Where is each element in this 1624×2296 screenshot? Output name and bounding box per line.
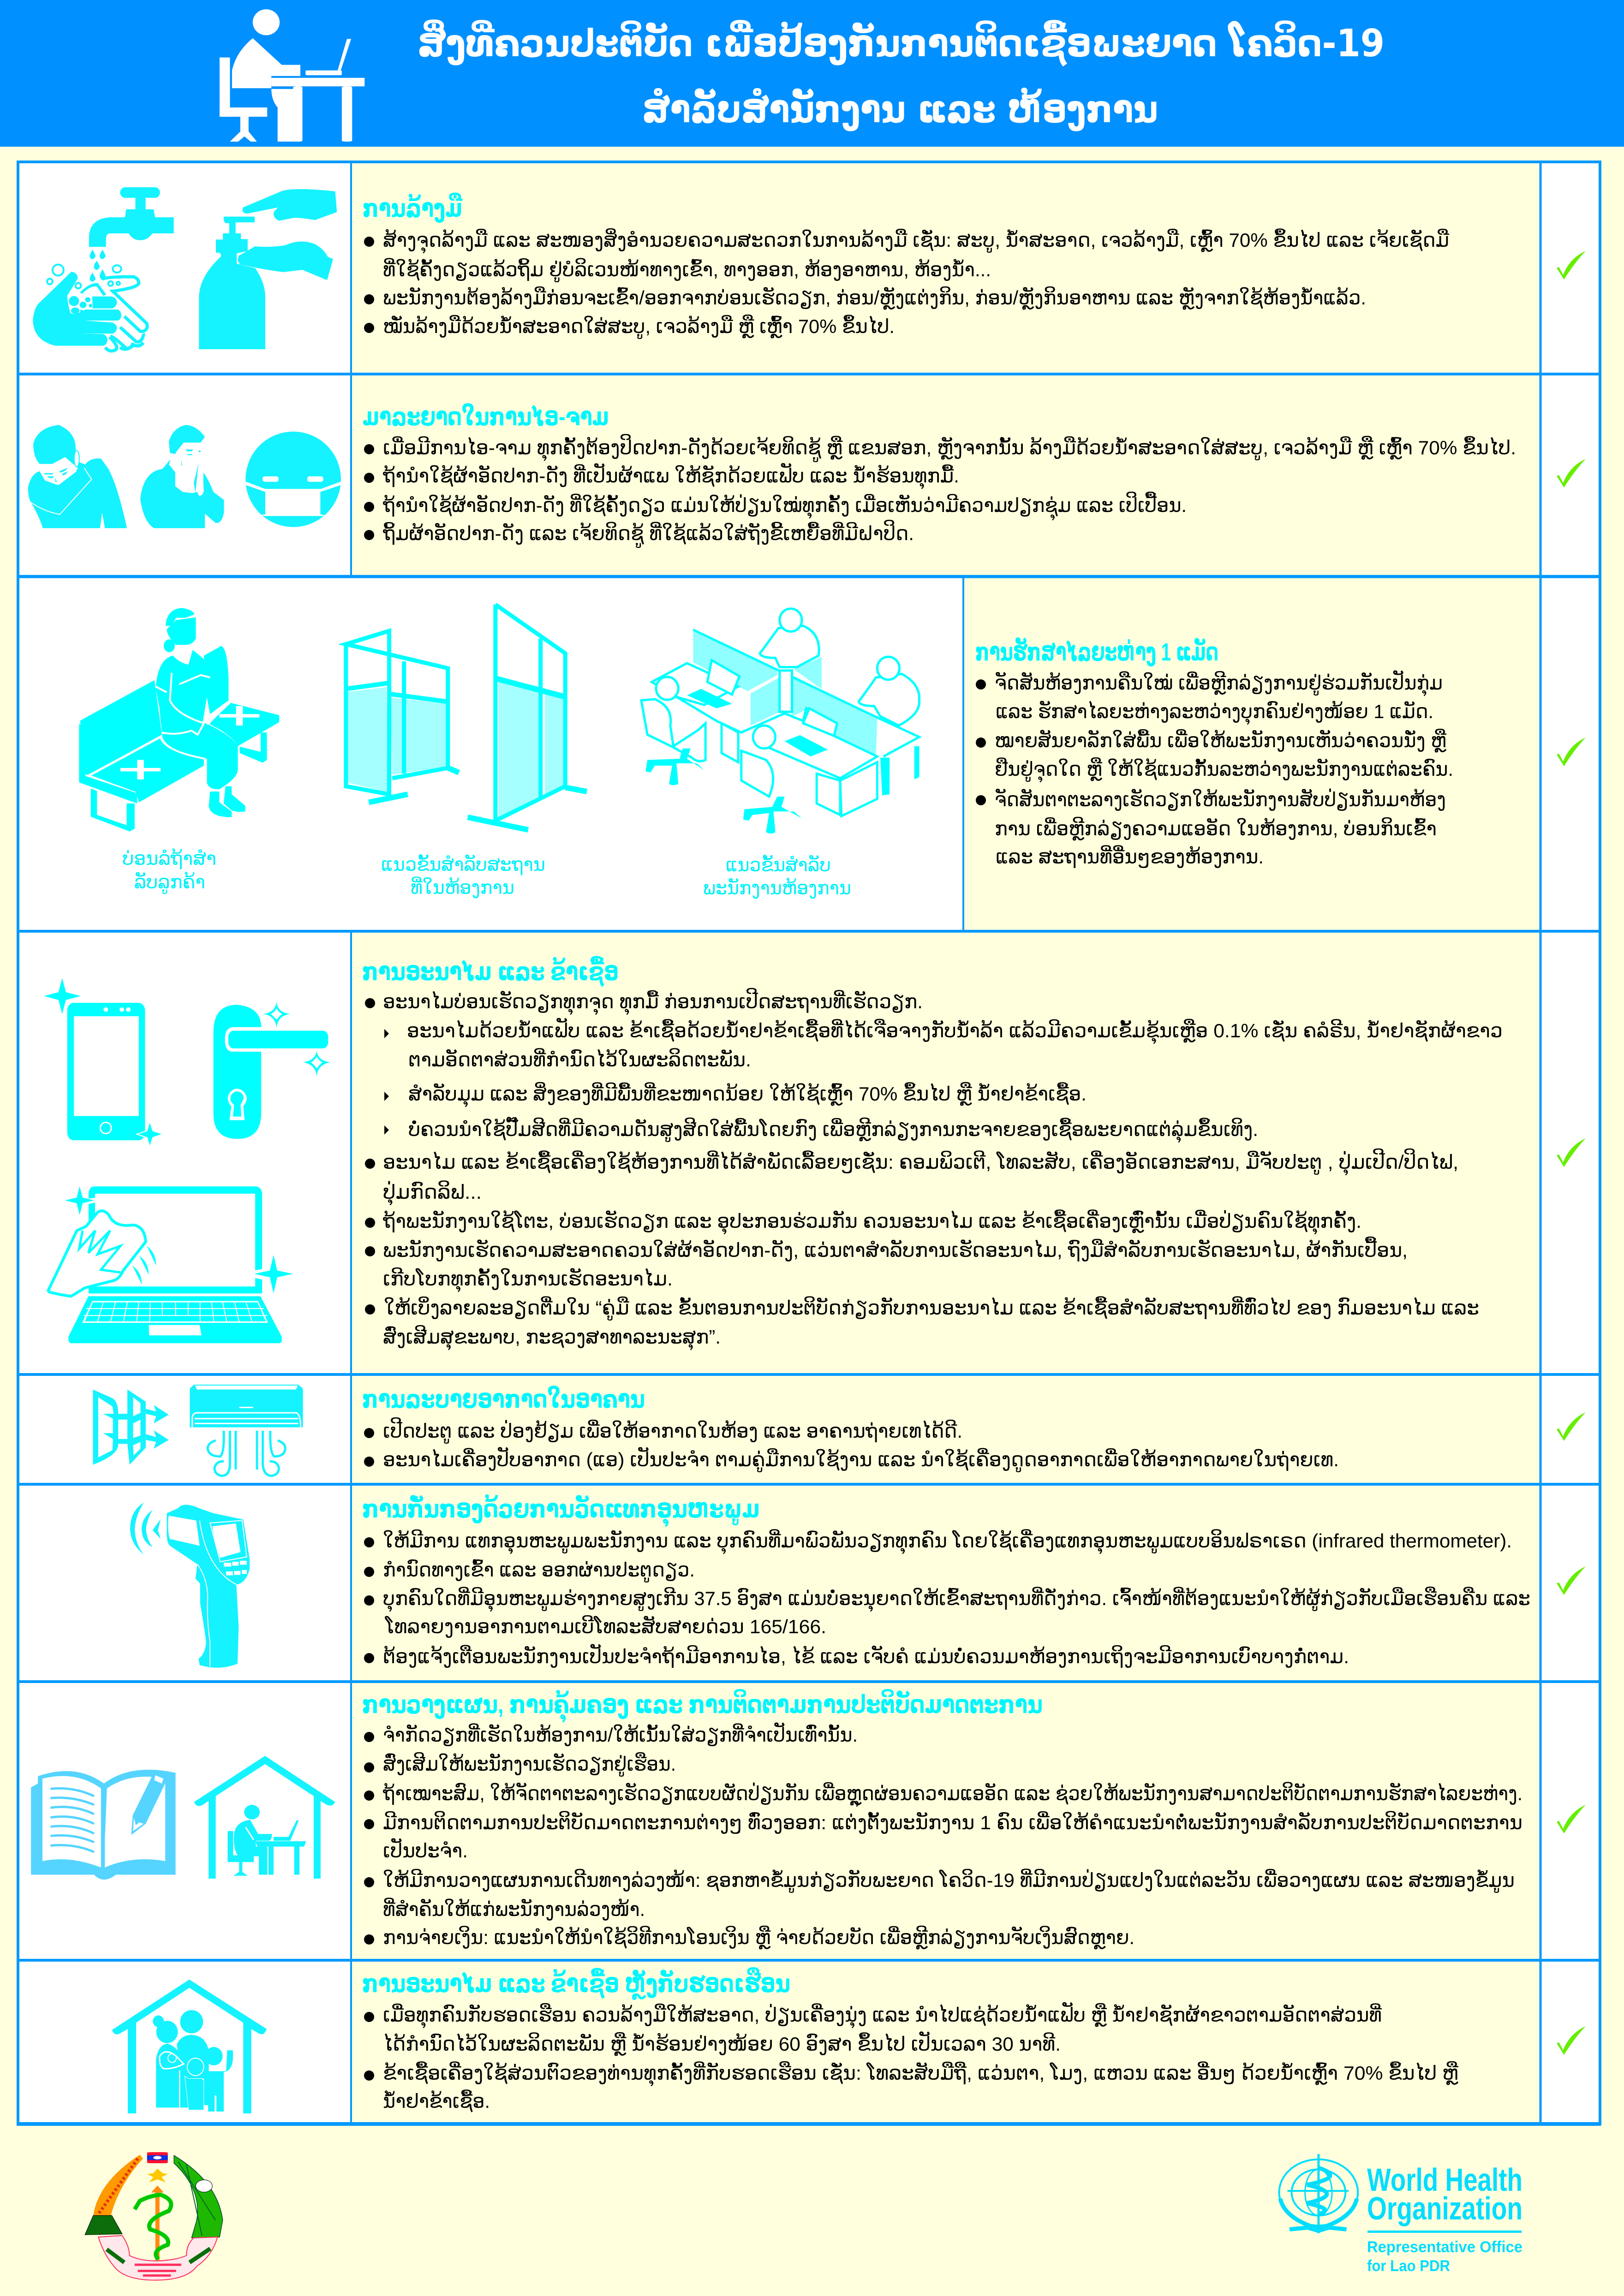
wordmark: Representative Office [1367, 2238, 1522, 2256]
caption: partitions for office staff: ພະນັກງານຫ້ອງການ [703, 877, 851, 899]
text block: ສົ່ງເສີມສຸຂະພາບ, ກະຊວງສາທາລະນະສຸກ”. [383, 1325, 721, 1351]
icon: check mark [1557, 459, 1586, 488]
text block: ໃຫ້ເບິ່ງລາຍລະອຽດຕື່ມໃນ “ຄູ່ມື ແລະ ຂັ້ນຕອນການປະຕິບັດກ່ຽວກັບການອະນາໄມ ແລະ ຂ້າເຊື້ອສຳລັບສະຖານທີ່ທົ່ວໄປ ຂອງ ກົມອະນາໄມ ແລະ [384, 1297, 1479, 1320]
icon: person at desk [220, 9, 364, 142]
text block: ພະນັກງານຕ້ອງລ້າງມືກ່ອນຈະເຂົ້າ/ອອກຈາກບ່ອນເຮັດວຽກ, ກ່ອນ/ຫຼັງແຕ່ງກິນ, ກ່ອນ/ຫຼັງກິນອາຫານ ແລະ ຫຼັງຈາກໃຊ້ຫ້ອງນ້ຳແລ້ວ. [383, 286, 1366, 310]
icon: office desks with partitions [641, 609, 919, 833]
text block: ຈຳກັດວຽກທີ່ເຮັດໃນຫ້ອງການ/ໃຫ້ເນັ້ນໃສ່ວຽກທີ່ຈຳເປັນເທົ່ານັ້ນ. [383, 1722, 858, 1746]
icon: standing partitions [346, 605, 587, 830]
text block: ໂທລາຍງານອາການຕາມເບີໂທລະສັບສາຍດ່ວນ 165/166. [385, 1615, 826, 1638]
icon: check mark [1557, 1566, 1586, 1595]
text block: ບໍ່ຄວນນຳໃຊ້ປັ໊ມສີດທີ່ມີຄວາມດັນສູງສີດໃສ່ພື້ນໂດຍກົງ ເພື່ອຫຼີກລ່ຽງການກະຈາຍຂອງເຊື້ອພະຍາດແຕ່ລຸ່ມຂຶ້ນເທິງ. [408, 1116, 1258, 1143]
text block: ແລະ ຮັກສາໄລຍະຫ່າງລະຫວ່າງບຸກຄົນຢ່າງໜ້ອຍ 1 ແມັດ. [996, 700, 1433, 726]
icon: WHO emblem [1279, 2154, 1358, 2233]
panel: cleaning and disinfection [44, 956, 1586, 1351]
wordmark [1367, 2162, 1522, 2275]
title line 1: ສິ່ງທີ່ຄວນປະຕິບັດ ເພື່ອປ້ອງກັນການຕິດເຊື້ອພະຍາດ ໂຄວິດ-19 [418, 19, 1385, 67]
caption: partitions for office staff: ແນວຂັ້ນສຳລັບ [726, 854, 831, 875]
text block [364, 1417, 1339, 1472]
wordmark: for Lao PDR [1367, 2257, 1450, 2275]
text block: ຖ້ານຳໃຊ້ຜ້າອັດປາກ-ດັງ ທີ່ເປັນຜ້າແພ ໃຫ້ຊັກດ້ວຍແຟັບ ແລະ ນ້ຳຮ້ອນທຸກມື້. [382, 463, 959, 490]
caption: waiting area: ລັບລູກຄ້າ [134, 871, 205, 894]
text block [364, 1529, 1530, 1668]
icon: check mark [1557, 1412, 1586, 1441]
panel: planning and monitoring [31, 1689, 1586, 1950]
icon: faucet, hands and sanitizer [33, 187, 337, 351]
text block: ຈັດສັນຕາຕະລາງເຮັດວຽກໃຫ້ພະນັກງານສັບປ່ຽນກັນມາຫ້ອງ [995, 788, 1446, 811]
text block: ຢືນຢູ່ຈຸດໃດ ຫຼື ໃຫ້ໃຊ້ແນວກັ້ນລະຫວ່າງພະນັກງານແຕ່ລະຄົນ. [995, 757, 1453, 783]
text block: ຕາມອັດຕາສ່ວນທີ່ກຳນົດໄວ້ໃນຜະລິດຕະພັນ. [408, 1048, 751, 1071]
text block: ເປັນປະຈຳ. [383, 1838, 468, 1862]
text block: ໄດ້ກຳນົດໄວ້ໃນຜະລິດຕະພັນ ຫຼື ນ້ຳຮ້ອນຢ່າງໜ້ອຍ 60 ອົງສາ ຂຶ້ນໄປ ເປັນເວລາ 30 ນາທີ. [383, 2031, 1061, 2056]
caption: waiting area: ບ່ອນລໍຖ້າສຳ [122, 848, 216, 869]
wordmark: Organization [1367, 2190, 1522, 2226]
icon: notebook with pen [31, 1770, 176, 1880]
heading: ການອະນາໄມ ແລະ ຂ້າເຊື້ອ [362, 956, 619, 987]
text block: ທີ່ສຳຄັນໃຫ້ແກ່ພະນັກງານລ່ວງໜ້າ. [383, 1898, 645, 1921]
text block: ໝາຍສັນຍາລັກໃສ່ພື້ນ ເພື່ອໃຫ້ພະນັກງານເຫັນວ່າຄວນນັ່ງ ຫຼື [995, 729, 1447, 753]
text block: ຖ້ານຳໃຊ້ຜ້າອັດປາກ-ດັງ ທີ່ໃຊ້ຄັ້ງດຽວ ແມ່ນໃຫ້ປ່ຽນໃໝ່ທຸກຄັ້ງ ເມື່ອເຫັນວ່າມີຄວາມປຽກຊຸ່ມ ແລະ ເປິເປື້ອນ. [382, 492, 1187, 521]
text block: ຕ້ອງແຈ້ງເຕືອນພະນັກງານເປັນປະຈຳຖ້າມີອາການໄອ, ໄຂ້ ແລະ ເຈັບຄໍ ແມ່ນບໍ່ຄວນມາຫ້ອງການເຖິງຈະມີອາການເບົາບາງກໍ່ຕາມ. [383, 1643, 1349, 1668]
icon: check mark [1557, 2026, 1586, 2055]
logo: Lao Ministry of Health emblem [85, 2152, 223, 2280]
text block [364, 2002, 1459, 2112]
text block: ເມື່ອທຸກຄົນກັບຮອດເຮືອນ ຄວນລ້າງມືໃຫ້ສະອາດ, ປ່ຽນເຄື່ອງນຸ່ງ ແລະ ນຳໄປແຊ່ດ້ວຍນ້ຳແຟັບ ຫຼື ນ້ຳຢາຊັກຜ້າຂາວຕາມອັດຕາສ່ວນທີ່ [383, 2002, 1382, 2029]
text block: ໃຫ້ມີການ ແທກອຸນຫະພູມພະນັກງານ ແລະ ບຸກຄົນທີ່ມາພົວພັນວຽກທຸກຄົນ ໂດຍໃຊ້ເຄື່ອງແທກອຸນຫະພູມແບບອິນຟຣາເຣດ (infrared thermometer). [383, 1529, 1512, 1555]
icon: infrared thermometer [130, 1503, 250, 1668]
text block: ຖິ້ມຜ້າອັດປາກ-ດັງ ແລະ ເຈ້ຍທິດຊູ້ ທີ່ໃຊ້ແລ້ວໃສ່ຖັງຂີ້ເຫຍື້ອທີ່ມີຝາປິດ. [382, 520, 914, 548]
text block: ອະນາໄມເຄື່ອງປັບອາກາດ (ແອ) ເປັນປະຈຳ ຕາມຄູ່ມືການໃຊ້ງານ ແລະ ນຳໃຊ້ເຄື່ອງດູດອາກາດເພື່ອໃຫ້ອາກາດພາຍໃນຖ່າຍເທ. [383, 1446, 1339, 1472]
text block: ໝັ່ນລ້າງມືດ້ວຍນ້ຳສະອາດໃສ່ສະບູ, ເຈວລ້າງມື ຫຼື ເຫຼົ້າ 70% ຂຶ້ນໄປ. [383, 315, 895, 339]
title line 2: ສຳລັບສຳນັກງານ ແລະ ຫ້ອງການ [642, 88, 1158, 131]
panel: temperature screening [130, 1495, 1586, 1668]
text block: ພະນັກງານເຮັດຄວາມສະອາດຄວນໃສ່ຜ້າອັດປາກ-ດັງ, ແວ່ນຕາສຳລັບການເຮັດອະນາໄມ, ຖົງມືສຳລັບການເຮັດອະນາໄມ, ຜ້າກັນເປື້ອນ, [383, 1237, 1408, 1261]
text block: ການຈ່າຍເງິນ: ແນະນຳໃຫ້ນຳໃຊ້ວິທີການໂອນເງິນ ຫຼື ຈ່າຍດ້ວຍບັດ ເພື່ອຫຼີກລ່ຽງການຈັບເງິນສົດຫຼາຍ. [383, 1926, 1134, 1950]
text block: ການ ເພື່ອຫຼີກລ່ຽງຄວາມແອອັດ ໃນຫ້ອງການ, ບ່ອນກິນເຂົ້າ [995, 817, 1437, 841]
text block: ແລະ ສະຖານທີ່ອື່ນໆຂອງຫ້ອງການ. [996, 845, 1264, 868]
text block [364, 434, 1516, 548]
text block: ອະນາໄມດ້ວຍນ້ຳແຟັບ ແລະ ຂ້າເຊື້ອດ້ວຍນ້ຳຢາຂ້າເຊື້ອທີ່ໄດ້ເຈືອຈາງກັບນ້ຳລ້າ ແລ້ວມີຄວາມເຂັ້ມຂຸ້ນເຫຼືອ 0.1% ເຊັ່ນ ຄລໍຣີນ, ນ້ຳຢາຊັກຜ້າຂາວ [407, 1017, 1503, 1045]
icon: check mark [1557, 251, 1586, 280]
icon: person working from home [194, 1756, 335, 1879]
text block: ສົ່ງເສີມໃຫ້ພະນັກງານເຮັດວຽກຢູ່ເຮືອນ. [383, 1752, 676, 1777]
panel: ventilation [93, 1385, 1586, 1476]
panel: physical distancing [79, 605, 1586, 899]
panel: cough etiquette [28, 403, 1586, 548]
text block: ເມື່ອມີການໄອ-ຈາມ ທຸກຄັ້ງຕ້ອງປິດປາກ-ດັງດ້ວຍເຈ້ຍທິດຊູ້ ຫຼື ແຂນສອກ, ຫຼັງຈາກນັ້ນ ລ້າງມືດ້ວຍນ້ຳສະອາດໃສ່ສະບູ, ເຈວລ້າງມື ຫຼື ເຫຼົ້າ 70% ຂຶ້ນໄປ. [383, 434, 1516, 462]
panel: disinfection at home [112, 1968, 1586, 2113]
text block: ອະນາໄມ ແລະ ຂ້າເຊື້ອເຄື່ອງໃຊ້ຫ້ອງການທີ່ໄດ້ສຳພັດເລື້ອຍໆເຊັ່ນ: ຄອມພິວເຕີ, ໂທລະສັບ, ເຄື່ອງອັດເອກະສານ, ມືຈັບປະຕູ , ປຸ່ມເປີດ/ປິດໄຟ, [383, 1148, 1458, 1176]
heading: ການຮັກສາໄລຍະຫ່າງ 1 ແມັດ [975, 637, 1218, 666]
icon: open window and air conditioner [93, 1385, 303, 1476]
text block: ຖ້າພະນັກງານໃຊ້ໂຕະ, ບ່ອນເຮັດວຽກ ແລະ ອຸປະກອນຮ່ວມກັນ ຄວນອະນາໄມ ແລະ ຂ້າເຊື້ອເຄື່ອງເຫຼົ່ານັ້ນ ເມື່ອປ່ຽນຄົນໃຊ້ທຸກຄັ້ງ. [382, 1210, 1361, 1235]
caption: partitions for office staff [703, 854, 851, 899]
icon: person on waiting bench [79, 608, 279, 832]
text block [364, 228, 1449, 339]
text block: ບຸກຄົນໃດທີ່ມີອຸນຫະພູມຮ່າງກາຍສູງເກີນ 37.5 ອົງສາ ແມ່ນບໍ່ອະນຸຍາດໃຫ້ເຂົ້າສະຖານທີ່ດັ່ງກ່າວ. ເຈົ້າໜ້າທີ່ຕ້ອງແນະນຳໃຫ້ຜູ້ກ່ຽວກັບເມືອເຮືອນຄືນ ແລະ [383, 1587, 1530, 1612]
caption: waiting area [122, 848, 216, 894]
icon: check mark [1557, 1138, 1586, 1167]
icon: check mark [1557, 1805, 1586, 1833]
icon: family in a house [112, 1980, 267, 2113]
text block: ມີການຕິດຕາມການປະຕິບັດມາດຕະການຕ່າງໆ ທົ່ວງອອກ: ແຕ່ງຕັ້ງພະນັກງານ 1 ຄົນ ເພື່ອໃຫ້ຄຳແນະນຳຕໍ່ພະນັກງານສຳລັບການປະຕິບັດມາດຕະການ [383, 1811, 1522, 1834]
icon: people coughing and face mask [28, 425, 341, 528]
caption: partitions for office spaces: ທີ່ໃນຫ້ອງການ [411, 876, 514, 898]
text block: ເປີດປະຕູ ແລະ ປ່ອງຢ້ຽມ ເພື່ອໃຫ້ອາກາດໃນຫ້ອງ ແລະ ອາຄານຖ່າຍເທໄດ້ດີ. [383, 1417, 962, 1444]
text block: ຂ້າເຊື້ອເຄື່ອງໃຊ້ສ່ວນຕົວຂອງທ່ານທຸກຄັ້ງທີ່ກັບຮອດເຮືອນ ເຊັ່ນ: ໂທລະສັບມືຖື, ແວ່ນຕາ, ໂມງ, ແຫວນ ແລະ ອື່ນໆ ດ້ວຍນ້ຳເຫຼົ້າ 70% ຂຶ້ນໄປ ຫຼື [383, 2061, 1459, 2087]
text block: ໃຫ້ມີການວາງແຜນການເດີນທາງລ່ວງໜ້າ: ຊອກຫາຂໍ້ມູນກ່ຽວກັບພະຍາດ ໂຄວິດ-19 ທີ່ມີການປ່ຽນແປງໃນແຕ່ລະວັນ ເພື່ອວາງແຜນ ແລະ ສະໜອງຂໍ້ມູນ [383, 1869, 1515, 1893]
header banner [0, 0, 1624, 147]
text block: ປຸ່ມກົດລິຟ... [383, 1180, 482, 1206]
text block: ຖ້າເໝາະສົມ, ໃຫ້ຈັດຕາຕະລາງເຮັດວຽກແບບຜັດປ່ຽນກັນ ເພື່ອຫຼຸດຜ່ອນຄວາມແອອັດ ແລະ ຊ່ວຍໃຫ້ພະນັກງານສາມາດປະຕິບັດຕາມການຮັກສາໄລຍະຫ່າງ. [382, 1782, 1522, 1808]
text block: ສຳລັບມຸມ ແລະ ສິ່ງຂອງທີ່ມີພື້ນທີ່ຂະໜາດນ້ອຍ ໃຫ້ໃຊ້ເຫຼົ້າ 70% ຂຶ້ນໄປ ຫຼື ນ້ຳຢາຂ້າເຊື້ອ. [408, 1082, 1087, 1108]
text block: ສ້າງຈຸດລ້າງມື ແລະ ສະໜອງສິ່ງອຳນວຍຄວາມສະດວກໃນການລ້າງມື ເຊັ່ນ: ສະບູ, ນ້ຳສະອາດ, ເຈວລ້າງມື, ເຫຼົ້າ 70% ຂຶ້ນໄປ ແລະ ເຈ້ຍເຊັດມື [383, 228, 1449, 254]
text block [364, 1722, 1522, 1950]
panel: hand washing [33, 187, 1586, 351]
heading: ການລະບາຍອາກາດໃນອາຄານ [362, 1386, 645, 1413]
text block: ກຳນົດທາງເຂົ້າ ແລະ ອອກຜ່ານປະຕູດຽວ. [383, 1559, 695, 1582]
heading: ມາລະຍາດໃນການໄອ-ຈາມ [363, 403, 609, 431]
caption: partitions for office spaces: ແນວຂັ້ນສຳລັບສະຖານ [381, 854, 545, 875]
text block: ນ້ຳຢາຂ້າເຊື້ອ. [383, 2090, 490, 2112]
wordmark: World Health [1367, 2162, 1522, 2198]
logo: World Health Organization [1279, 2154, 1522, 2275]
text block: ອະນາໄມບ່ອນເຮັດວຽກທຸກຈຸດ ທຸກມື້ ກ່ອນການເປີດສະຖານທີ່ເຮັດວຽກ. [383, 988, 923, 1016]
heading: ການອະນາໄມ ແລະ ຂ້າເຊື້ອ ຫຼັງກັບຮອດເຮືອນ [362, 1968, 790, 2000]
text block: ຈັດສັນຫ້ອງການຄືນໃໝ່ ເພື່ອຫຼີກລ່ຽງການຢູ່ຮ່ວມກັນເປັນກຸ່ມ [995, 670, 1443, 697]
text block [365, 988, 1503, 1351]
icon: check mark [1557, 738, 1586, 766]
text block [976, 670, 1453, 868]
text block: ທີ່ໃຊ້ຄັ້ງດຽວແລ້ວຖິ້ມ ຢູ່ບໍລິເວນໜ້າທາງເຂົ້າ, ທາງອອກ, ຫ້ອງອາຫານ, ຫ້ອງນ້ຳ... [383, 258, 991, 282]
heading: ການລ້າງມື [363, 193, 463, 223]
text block: ເກີບໂບກທຸກຄັ້ງໃນການເຮັດອະນາໄມ. [383, 1267, 673, 1293]
heading: ການກັ່ນກອງດ້ວຍການວັດແທກອຸນຫະພູມ [362, 1495, 760, 1527]
caption: partitions for office spaces [381, 854, 545, 898]
icon: phone, door handle and laptop cleaning [44, 978, 330, 1343]
heading: ການວາງແຜນ, ການຄຸ້ມຄອງ ແລະ ການຕິດຕາມການປະຕິບັດມາດຕະການ [362, 1689, 1043, 1723]
